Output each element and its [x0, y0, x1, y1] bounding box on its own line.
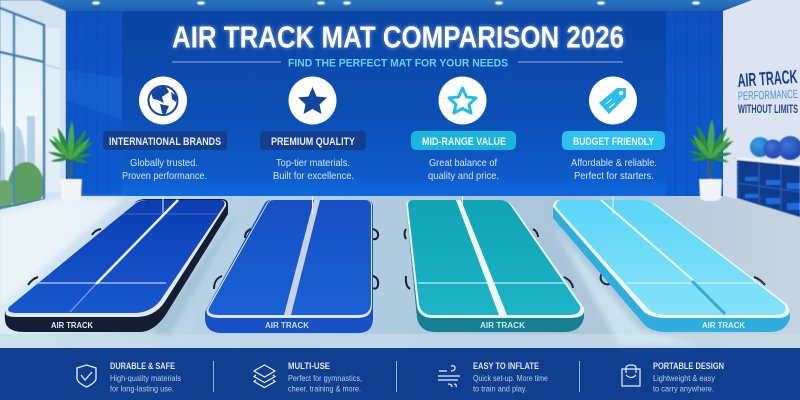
subtitle: FIND THE PERFECT MAT FOR YOUR NEEDS: [288, 58, 508, 70]
mat label: AIR TRACK: [265, 321, 309, 330]
shelf with exercise balls: [737, 136, 800, 217]
pointer: [312, 196, 314, 214]
mat 3: teal: [404, 196, 584, 332]
left window: [0, 0, 66, 212]
feature heading: MULTI-USE: [288, 361, 330, 372]
column: budget friendly: [562, 76, 665, 182]
right curtain: [666, 11, 724, 196]
feature heading: EASY TO INFLATE: [473, 361, 539, 372]
floor: [0, 196, 800, 348]
feature text: Perfect for gymnastics,: [288, 373, 362, 383]
ceiling: [40, 0, 752, 11]
wall text: air track: [737, 67, 798, 116]
feature text line two: to carry anywhere.: [653, 384, 714, 394]
mat 4: light blue: [553, 196, 790, 345]
label: international brands: INTERNATIONAL BRANDS: [109, 136, 221, 148]
icon: outlined star: [438, 76, 486, 124]
plant right: [687, 118, 735, 201]
description: Globally trusted.: [130, 157, 198, 169]
mat label: AIR TRACK: [702, 321, 745, 330]
column: international brands: [103, 76, 227, 182]
description line two: Perfect for starters.: [574, 170, 654, 182]
label: mid-range value: MID-RANGE VALUE: [422, 136, 506, 148]
mat 1: navy: [5, 196, 238, 335]
description: Great balance of: [429, 157, 497, 169]
feature heading: PORTABLE DESIGN: [653, 361, 724, 372]
label: budget friendly: BUDGET FRIENDLY: [573, 136, 655, 148]
left curtain: [66, 11, 122, 196]
icon: globe: [139, 76, 187, 124]
feature text line two: for long-lasting use.: [110, 384, 174, 394]
ceiling lights: [92, 1, 700, 5]
icon: bag: [622, 365, 640, 386]
feature text line two: cheer, training & more.: [288, 384, 361, 394]
description line two: quality and price.: [428, 170, 499, 182]
icon: air flow: [438, 366, 460, 387]
feature: portable design: [622, 361, 724, 394]
mat 2: blue: [205, 196, 378, 333]
mat label: AIR TRACK: [480, 321, 525, 330]
label: premium quality: PREMIUM QUALITY: [271, 136, 356, 148]
title: AIR TRACK MAT COMPARISON 2026: [172, 20, 624, 54]
footer bar: [0, 348, 800, 400]
mat label: AIR TRACK: [51, 321, 93, 330]
icon: shield: [77, 365, 96, 387]
title: AIR TRACK MAT COMPARISON 2026: [172, 20, 624, 54]
description line two: Proven performance.: [122, 170, 207, 182]
feature text: Quick set-up. More time: [473, 373, 548, 383]
icon: layers: [254, 365, 275, 388]
right wall: [723, 0, 800, 215]
feature: easy to inflate: [438, 361, 548, 394]
feature text: Lightweight & easy: [653, 373, 716, 383]
description: Top-tier materials.: [276, 157, 350, 169]
icon: star: [288, 76, 336, 124]
pointer: [612, 196, 614, 214]
pointer: [462, 196, 464, 215]
plant left: [47, 121, 95, 201]
feature text: High-quality materials: [110, 373, 181, 383]
icon: price tag: [589, 76, 637, 124]
feature: durable and safe: [77, 361, 181, 394]
column: premium quality: [260, 76, 366, 182]
column: mid-range value: [411, 76, 516, 182]
feature heading: DURABLE & SAFE: [110, 361, 175, 372]
feature text line two: to train and play.: [473, 384, 527, 394]
description line two: Built for excellence.: [273, 170, 354, 182]
description: Affordable & reliable.: [571, 157, 657, 169]
feature: multi-use: [254, 361, 362, 394]
pointer: [162, 196, 164, 213]
